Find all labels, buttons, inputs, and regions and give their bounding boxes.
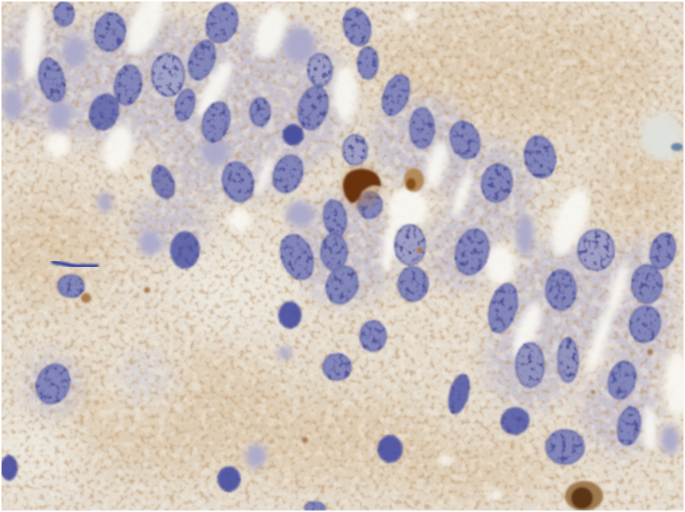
brown stained cell — [341, 165, 381, 207]
smaller brown stained body — [404, 168, 424, 192]
pale central neuropil — [0, 235, 305, 490]
mitotic figure — [53, 262, 97, 266]
brown stained cell at bottom edge — [565, 481, 603, 511]
glial cell at right edge — [641, 114, 683, 160]
small dark brown granules — [81, 247, 653, 443]
